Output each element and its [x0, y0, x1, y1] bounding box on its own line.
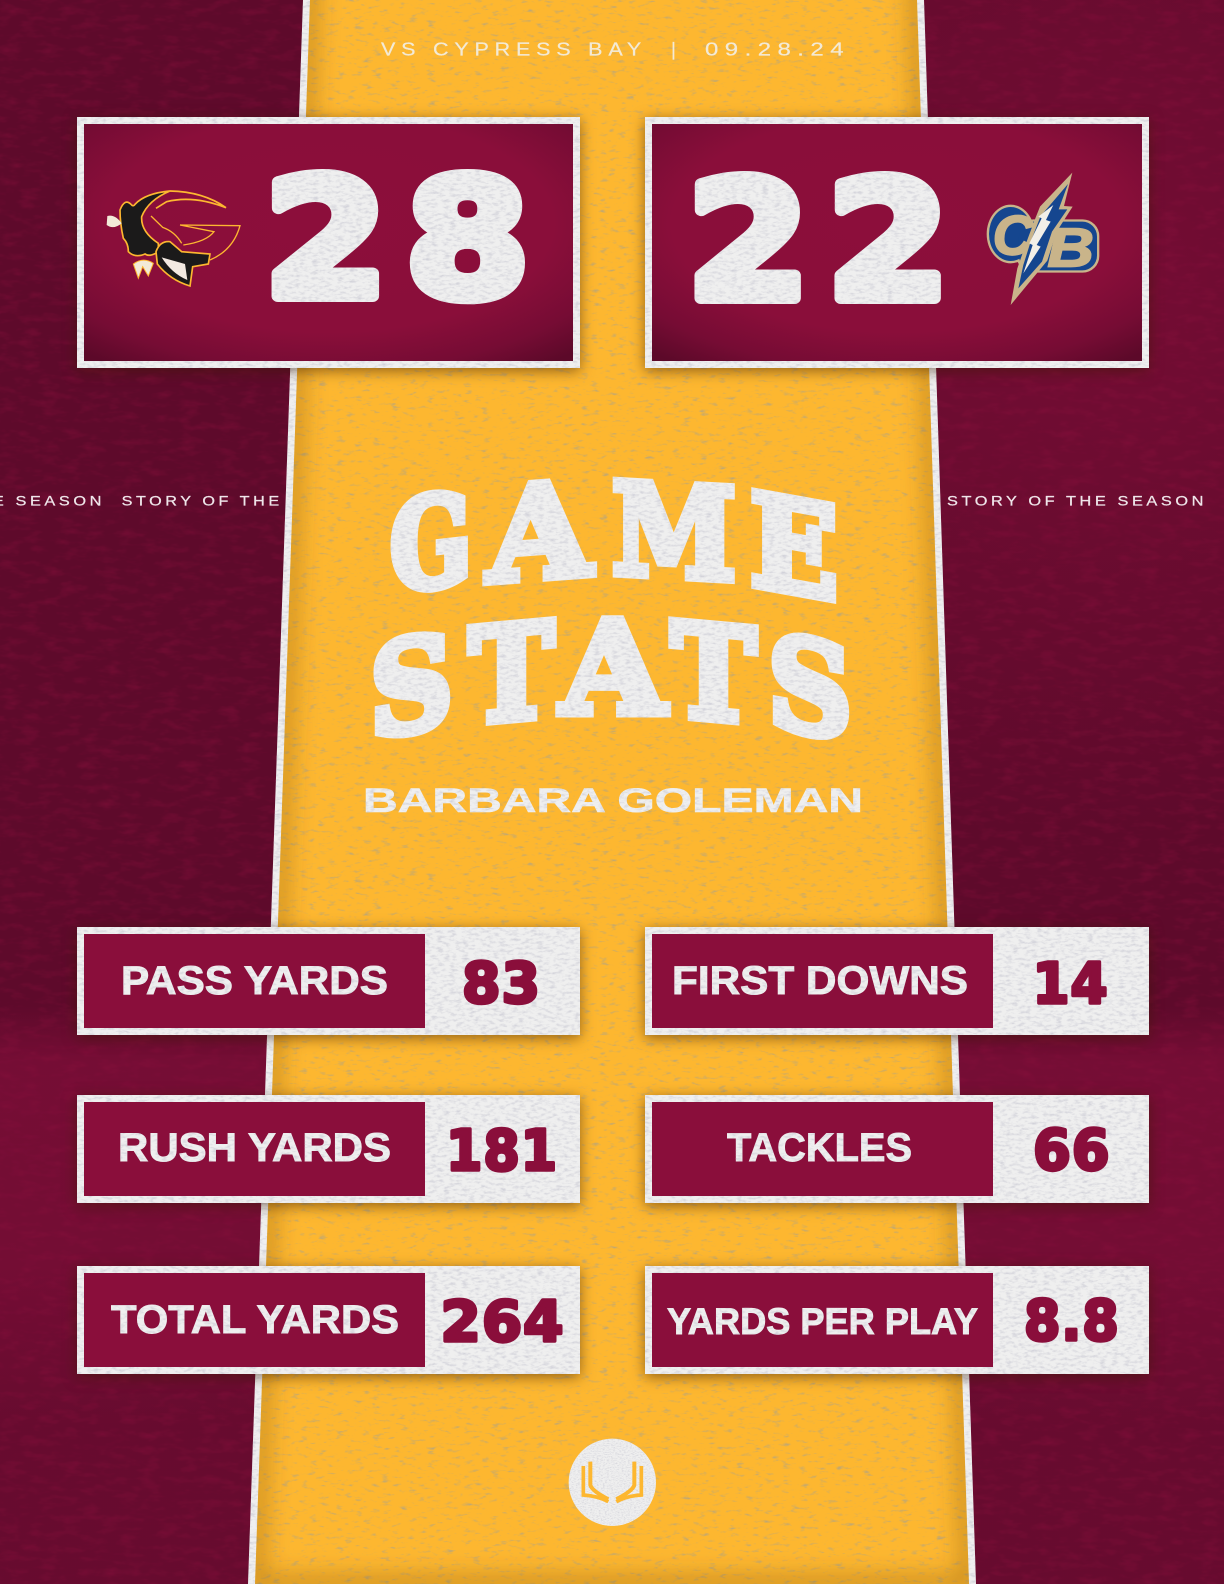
match line: opponent and date: 09.28.24: [705, 38, 850, 60]
title: GAME STATS arched lettering: S: [370, 606, 453, 769]
title: GAME STATS arched lettering: A: [486, 454, 593, 613]
match line: opponent and date: [381, 38, 850, 60]
side text right: story of the season: STORY OF THE SEASON: [947, 494, 1207, 508]
icon: Barbara Goleman gator logo: [107, 191, 240, 286]
stat: rush yards: 181: [446, 1119, 558, 1184]
stat: first downs: [645, 927, 1149, 1035]
panel: home score: [77, 117, 580, 368]
panel: away score: [645, 117, 1149, 368]
away score number: 22: [687, 148, 967, 337]
icon: Cypress Bay CB lightning logo: C: [993, 204, 1035, 267]
stat: total yards: 264: [440, 1290, 564, 1355]
stat: tackles: [645, 1095, 1149, 1203]
stat: pass yards: [77, 927, 580, 1035]
title: GAME STATS arched lettering: S: [768, 607, 852, 771]
stat: pass yards: 83: [462, 952, 541, 1016]
title: GAME STATS arched lettering: M: [612, 455, 736, 610]
stat: yards per play: 8.8: [1024, 1289, 1120, 1354]
title: GAME STATS arched lettering: G: [390, 466, 472, 621]
icon: Cypress Bay CB lightning logo: [987, 173, 1099, 305]
stat: rush yards: [77, 1095, 580, 1203]
title: GAME STATS arched lettering: E: [750, 466, 838, 631]
stat: total yards: TOTAL YARDS: [111, 1298, 399, 1342]
stat: yards per play: [645, 1266, 1149, 1374]
icon: Cypress Bay CB lightning logo: B: [1047, 217, 1094, 279]
subtitle: school name: BARBARA GOLEMAN: [363, 782, 863, 820]
side text left: story of the season: STORY OF THE: [122, 494, 283, 508]
stat: first downs: FIRST DOWNS: [672, 959, 968, 1003]
title: GAME STATS arched lettering: A: [560, 594, 667, 744]
title: GAME STATS arched lettering: [370, 454, 852, 771]
side text left: story of the season: [0, 494, 283, 508]
icon: open book badge: [569, 1439, 656, 1526]
title: GAME STATS arched lettering: T: [671, 595, 756, 754]
stat: rush yards: RUSH YARDS: [118, 1126, 391, 1170]
stat: first downs: 14: [1032, 952, 1108, 1017]
home score number: 28: [264, 146, 547, 335]
stat: yards per play: YARDS PER PLAY: [667, 1301, 978, 1342]
match line: opponent and date: |: [671, 38, 676, 60]
match line: opponent and date: VS CYPRESS BAY: [381, 38, 647, 60]
stat: total yards: [77, 1266, 580, 1374]
stat: pass yards: PASS YARDS: [121, 959, 388, 1003]
yellow centre road with white edge lines: [240, 0, 980, 1584]
stat: tackles: TACKLES: [727, 1126, 912, 1170]
title: GAME STATS arched lettering: T: [469, 594, 554, 754]
stat: tackles: 66: [1033, 1118, 1110, 1184]
